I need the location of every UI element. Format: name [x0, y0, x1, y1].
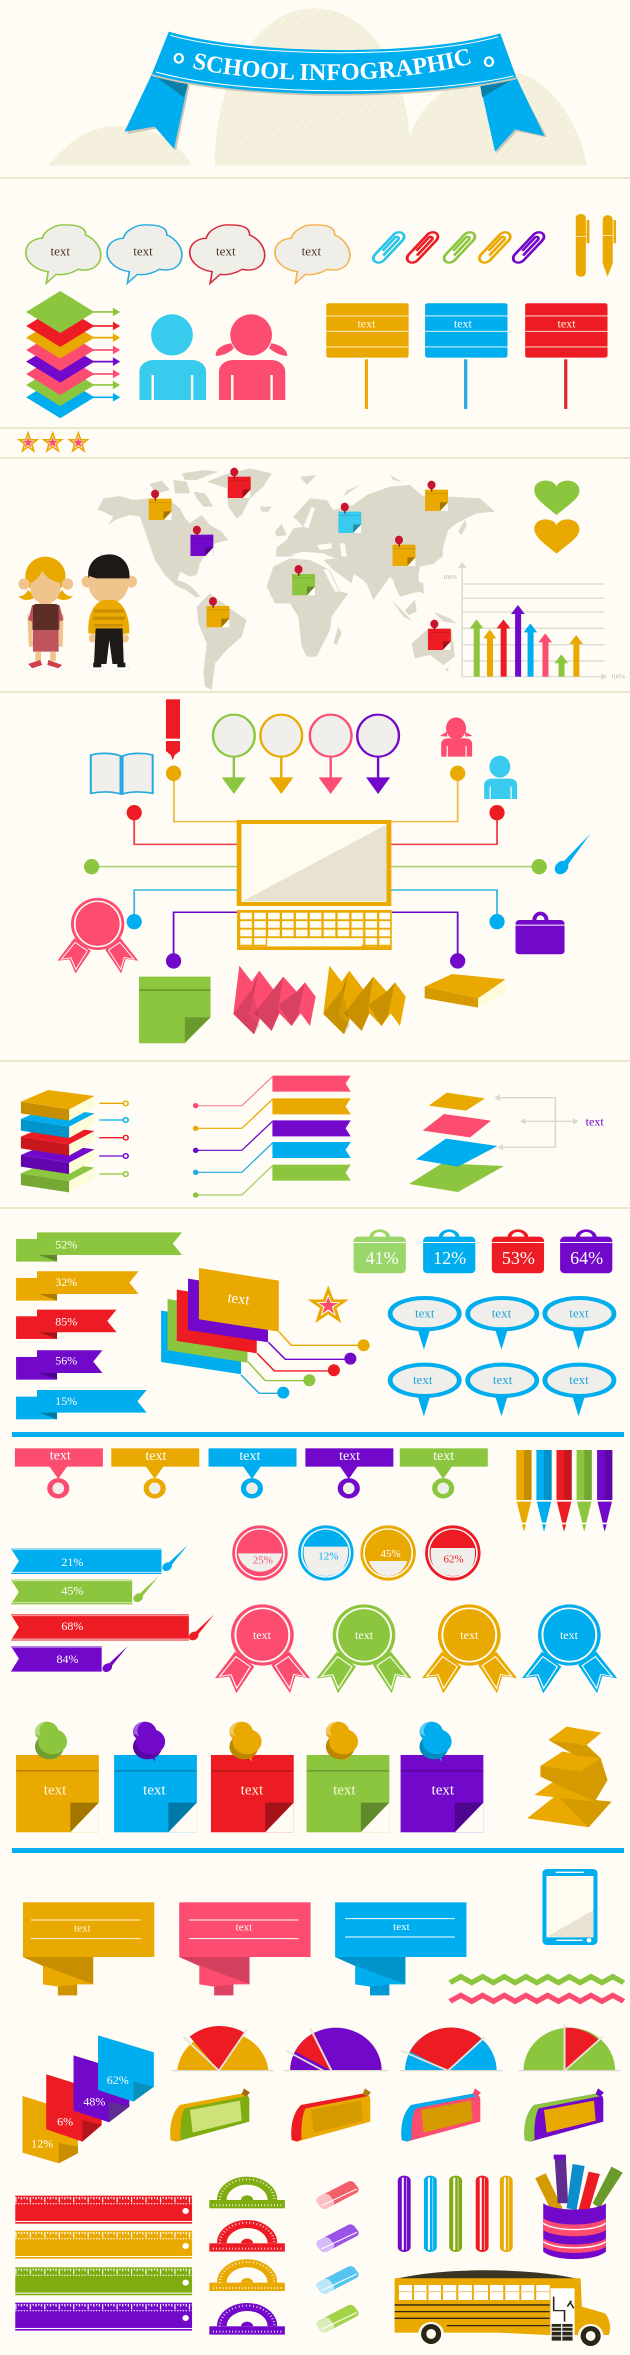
pinned note purple: text	[432, 1783, 455, 1799]
protractor red	[209, 2223, 285, 2252]
percent ribbon 52	[16, 1232, 182, 1262]
section: banners, pies, rulers, bus	[15, 1869, 624, 2348]
percent ribbon 15: 15%	[55, 1394, 77, 1408]
zigzag green	[450, 1977, 624, 1983]
paperclips	[371, 230, 547, 265]
folded paper zigzag	[527, 1727, 612, 1827]
section: laptop hub	[57, 699, 590, 1043]
pen cup	[535, 2155, 623, 2259]
icon: girl	[216, 314, 287, 400]
stair chart: 62%	[107, 2073, 129, 2087]
banner orange: text	[74, 1922, 91, 1934]
chalk sticks	[398, 2176, 513, 2252]
boy character	[82, 554, 137, 671]
tag blue: text	[239, 1449, 261, 1464]
speech bubbles grid: text	[569, 1306, 589, 1321]
percent ribbon 85: 85%	[55, 1314, 77, 1328]
speech cloud green: text	[51, 244, 70, 259]
flags	[272, 1076, 351, 1181]
pinned note green	[307, 1722, 389, 1832]
bag 12: 12%	[433, 1248, 466, 1268]
ribbon ornament dots	[175, 54, 493, 66]
arrow bar chart	[443, 562, 625, 681]
folded paper pink	[233, 966, 316, 1034]
pinned note orange	[16, 1722, 99, 1832]
rosette pink: text	[253, 1628, 272, 1642]
flag dots	[193, 1103, 198, 1198]
icon: paint brush	[552, 834, 590, 877]
icon: boy small	[484, 756, 517, 799]
layer stack with arrows	[26, 291, 120, 418]
protractor orange	[209, 2262, 285, 2291]
tag purple: text	[339, 1449, 360, 1464]
sign red	[525, 303, 608, 409]
percent ribbon 15	[16, 1390, 147, 1419]
banner pink: text	[236, 1922, 252, 1934]
icon: phone	[542, 1869, 597, 1945]
rosette blue	[522, 1604, 617, 1693]
arrow bar chart: 100%	[611, 675, 625, 681]
percent ribbon 56	[16, 1350, 102, 1380]
speech bubbles grid	[390, 1298, 614, 1416]
title: SCHOOL INFOGRAPHIC	[193, 49, 471, 80]
stars row	[19, 433, 87, 451]
tag green: text	[433, 1449, 454, 1464]
percent ribbon 52: 52%	[55, 1237, 77, 1251]
speech bubbles grid: text	[493, 1372, 513, 1387]
ruler purple	[15, 2303, 192, 2331]
section: tags, pencils, bars, rosettes, notes	[11, 1448, 617, 1832]
circle gauge 12: 12%	[318, 1550, 338, 1562]
speech cloud red	[190, 225, 265, 283]
protractor purple	[209, 2306, 285, 2335]
percent ribbon 56: 56%	[55, 1354, 77, 1368]
circle gauge 45	[360, 1525, 416, 1581]
icon: award rosette	[57, 898, 138, 974]
section: map notes, kids, hearts, chart	[18, 468, 625, 681]
bar 45 percent	[11, 1576, 159, 1604]
half pie blue	[400, 2028, 502, 2071]
icon: open book	[91, 753, 153, 794]
speech cloud orange	[275, 225, 350, 283]
layered plane arrows	[494, 1094, 579, 1151]
circle gauge 25	[232, 1525, 288, 1581]
section: clouds, clips, pens, stack, people, signs	[19, 214, 616, 451]
speech bubbles grid: text	[492, 1306, 512, 1321]
percent ribbon 85	[16, 1310, 117, 1339]
bar 68 percent	[11, 1614, 214, 1642]
bag 41	[354, 1229, 406, 1273]
rosette blue: text	[560, 1628, 579, 1642]
laptop	[237, 822, 392, 950]
tag green	[400, 1448, 488, 1496]
icon: girl small	[440, 717, 473, 757]
bar 68 percent: 68%	[61, 1619, 83, 1633]
marker circle purple	[357, 715, 399, 794]
marker circle orange	[260, 715, 302, 794]
icon: purple bag	[516, 912, 565, 954]
icon: boy	[139, 314, 206, 400]
circle gauge 45: 45%	[380, 1548, 401, 1560]
tag pink	[15, 1448, 103, 1496]
flag lines	[196, 1077, 272, 1195]
speech bubbles grid: text	[569, 1372, 589, 1387]
pinned note red: text	[241, 1783, 264, 1799]
ruler orange	[15, 2231, 192, 2259]
sign orange	[326, 303, 409, 409]
rosette green: text	[355, 1628, 374, 1642]
hills background	[48, 8, 587, 166]
ruler green	[15, 2267, 192, 2295]
folded paper orange	[323, 966, 406, 1034]
bag 64: 64%	[570, 1248, 603, 1268]
pencils	[516, 1450, 612, 1532]
pencil case orange	[291, 2088, 371, 2142]
pencil case green	[170, 2088, 250, 2142]
ribbon tails	[125, 74, 547, 153]
speech cloud blue: text	[133, 244, 153, 259]
percent ribbon 32: 32%	[55, 1275, 77, 1289]
pinned note purple	[401, 1722, 483, 1832]
map sticky notes	[149, 468, 451, 650]
rosette green	[317, 1604, 412, 1693]
half pie purple	[284, 2028, 387, 2071]
bag 12	[423, 1229, 475, 1273]
bar 45 percent: 45%	[61, 1584, 83, 1598]
girl character	[18, 557, 73, 670]
pinned note green: text	[333, 1783, 356, 1799]
percent ribbon 32	[16, 1271, 139, 1301]
speech cloud green	[26, 225, 101, 283]
bar 84 percent	[11, 1646, 128, 1674]
connector lines	[92, 773, 539, 961]
rosette pink	[215, 1604, 310, 1693]
layered planes	[409, 1093, 504, 1192]
icon: pens	[576, 214, 616, 277]
icon: closed book	[425, 974, 505, 1008]
tag orange	[111, 1448, 199, 1496]
speech cloud orange: text	[302, 244, 322, 259]
bag 53: 53%	[502, 1248, 535, 1268]
bar 21 percent	[11, 1545, 188, 1574]
bar 21 percent: 21%	[61, 1555, 83, 1569]
ribbon band	[152, 32, 516, 96]
tag orange: text	[145, 1449, 167, 1464]
pinned note blue: text	[143, 1783, 166, 1799]
sticky note green	[139, 977, 211, 1043]
icon: red pencil	[166, 699, 180, 760]
label: text: text	[586, 1114, 604, 1128]
sign orange: text	[357, 316, 376, 330]
circle gauge 62: 62%	[444, 1553, 464, 1565]
tag pink: text	[50, 1448, 71, 1463]
rosette orange	[422, 1604, 517, 1693]
bag 41: 41%	[366, 1248, 399, 1268]
banner orange	[23, 1902, 154, 1995]
divider lines	[0, 177, 630, 1209]
bag 64	[560, 1229, 612, 1273]
tag purple	[305, 1448, 393, 1496]
pinned note red	[211, 1722, 294, 1832]
stair chart: 48%	[83, 2094, 105, 2108]
banner pink	[179, 1902, 311, 1995]
rosette orange: text	[460, 1628, 479, 1642]
speech bubbles grid: text	[413, 1372, 433, 1387]
bag 53	[492, 1229, 544, 1273]
section: title header	[48, 8, 587, 166]
eraser green	[315, 2303, 361, 2334]
icon: orange heart	[534, 519, 579, 554]
blue separator bars	[12, 1432, 624, 1853]
stair chart	[23, 2035, 154, 2163]
stacked card lines	[241, 1332, 364, 1393]
icon: green heart	[534, 481, 579, 515]
pinned note blue	[114, 1722, 197, 1832]
sign blue: text	[454, 316, 473, 330]
eraser pink	[315, 2180, 361, 2210]
arrow bar chart: 100%	[443, 575, 457, 581]
banner blue	[335, 1902, 466, 1995]
pencil case purple	[524, 2088, 604, 2142]
bar 84 percent: 84%	[56, 1652, 79, 1666]
book stack	[21, 1090, 94, 1192]
sign red: text	[558, 316, 576, 330]
world map	[97, 468, 495, 690]
sign blue	[425, 303, 507, 409]
marker circle green	[213, 715, 255, 794]
tag blue	[209, 1448, 297, 1496]
section: books, flags, layers	[16, 1076, 614, 1419]
stair chart: 6%	[57, 2115, 73, 2129]
connector dots	[84, 766, 547, 969]
eraser blue	[315, 2265, 361, 2295]
circle gauge 62	[425, 1525, 481, 1581]
pencil case pink	[401, 2088, 481, 2142]
zigzag pink	[450, 1995, 624, 2001]
stacked cards	[161, 1268, 279, 1374]
school bus	[395, 2270, 610, 2348]
circle gauge 25: 25%	[253, 1554, 273, 1566]
stair chart: 12%	[31, 2136, 53, 2150]
marker circle pink	[310, 715, 352, 794]
book stack pointers	[99, 1101, 128, 1176]
ruler red	[15, 2196, 192, 2224]
speech bubbles grid: text	[415, 1306, 435, 1321]
stacked card dots	[277, 1339, 370, 1399]
pinned note orange: text	[44, 1783, 67, 1799]
banner blue: text	[393, 1921, 410, 1933]
eraser purple	[315, 2223, 361, 2254]
half pie green	[518, 2024, 621, 2071]
icon: star	[312, 1290, 345, 1320]
circle gauge 12	[298, 1525, 354, 1581]
half pie orange	[172, 2026, 274, 2071]
stacked cards: text	[226, 1290, 251, 1309]
speech cloud red: text	[216, 244, 236, 259]
speech cloud blue	[107, 225, 182, 283]
protractor green	[209, 2179, 285, 2208]
